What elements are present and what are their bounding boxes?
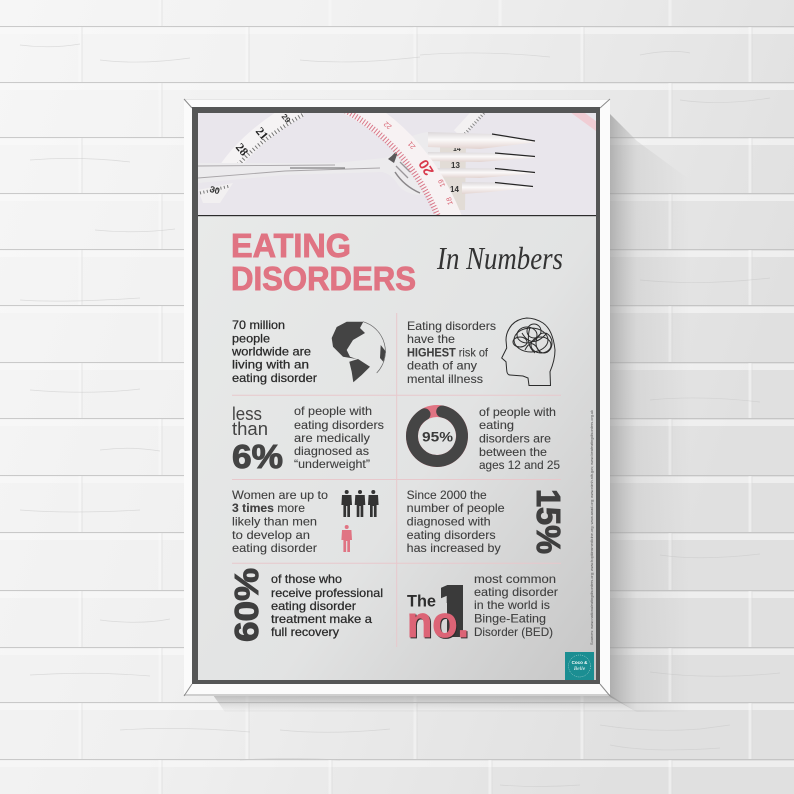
text: highest risk — [407, 319, 496, 386]
panel: highest risk of death — [407, 318, 555, 386]
text: since 2000: number of people — [407, 501, 505, 515]
text: underweight: “underweight” — [294, 457, 370, 471]
tape: pink numbered tape: 21 — [407, 139, 417, 150]
stat: 60% rotated: 60% — [229, 568, 266, 642]
icon: three men — [341, 490, 379, 517]
stat: less than 6% — [232, 404, 283, 475]
logo: Coco & Belle: Coco & — [572, 660, 588, 665]
text: binge-eating disorder: eating disorder — [474, 585, 558, 599]
logo: Coco & Belle: Belle — [574, 666, 586, 672]
panel: less than 6% — [232, 404, 384, 475]
text: underweight: diagnosed as — [294, 444, 369, 458]
text: highest risk: have the — [407, 332, 455, 346]
tape: pink numbered tape: 19 — [438, 178, 447, 188]
text: 60% recovery: of those who — [271, 572, 342, 586]
text: highest risk: Eating disorders — [407, 319, 496, 333]
stat: The no. 1 — [407, 585, 468, 639]
stat: 15% rotated: 15% — [529, 489, 566, 554]
chart: donut 95%: 95% — [422, 430, 453, 444]
text: 70 million: worldwide are — [231, 344, 311, 358]
text: since 2000: eating disorders — [407, 528, 496, 542]
icon: one woman — [341, 525, 352, 552]
tape: strips behind the fork — [440, 110, 485, 210]
tape: strips behind the fork: 14 — [453, 146, 461, 153]
text: 60% recovery: full recovery — [271, 625, 339, 639]
text: highest risk: HIGHEST risk of — [407, 346, 489, 360]
chart: donut 95% — [412, 411, 462, 461]
tape: white left tape: 29 — [280, 112, 293, 125]
tape: white left tape: 21 — [253, 124, 271, 143]
stat: less than 6%: less — [232, 404, 262, 424]
text: highest risk: death of any — [407, 358, 477, 372]
panel: 95% donut — [412, 405, 560, 472]
text: 70 million: eating disorder — [232, 371, 317, 385]
text: 60% recovery: treatment make a — [271, 612, 372, 626]
source note: Sources: www.nationaleatingdisorders.org; www.hopkinsmedicine.org; www.anad.org; www.nimh.nih.gov; www.beateatingdisorders.org.uk — [590, 410, 594, 645]
text: underweight: eating disorders — [294, 418, 384, 432]
tape: strips behind the fork: 14 — [450, 185, 459, 194]
panel: 70 million people — [231, 318, 386, 385]
title: EATING — [231, 228, 351, 265]
tape: strips behind the fork: 13 — [451, 161, 460, 170]
text: underweight: are medically — [294, 431, 370, 445]
text: since 2000 — [407, 488, 505, 555]
text: women 3 times: 3 times more — [232, 501, 305, 515]
text: ages 12 and 25: eating — [479, 418, 514, 432]
title: DISORDERS — [231, 261, 416, 298]
text: 60% recovery: eating disorder — [271, 599, 356, 613]
text: ages 12 and 25: disorders are — [479, 432, 551, 446]
panel: since 2000 — [407, 488, 566, 555]
text: since 2000: Since 2000 the — [407, 488, 487, 502]
title — [231, 228, 416, 298]
text: women 3 times: to develop an — [232, 528, 310, 542]
icon: globe — [332, 322, 386, 382]
text: women 3 times — [232, 488, 328, 555]
tape: white left tape — [198, 108, 304, 203]
tape: pink numbered tape: 20 — [415, 157, 437, 179]
text: 70 million: people — [232, 332, 270, 346]
poster body — [198, 113, 596, 680]
text: women 3 times: likely than men — [232, 514, 317, 528]
tape: pink corner strip — [572, 113, 596, 131]
stat: The no. 1: no. — [408, 599, 470, 648]
text: 70 million: living with an — [232, 358, 309, 372]
text: women 3 times: eating disorder — [232, 541, 317, 555]
tape: white left tape: 30 — [209, 184, 221, 196]
text: ages 12 and 25: between the — [479, 445, 547, 459]
fork — [198, 132, 535, 195]
header photo: fork and measuring tape — [198, 113, 596, 215]
text: binge-eating disorder — [474, 572, 558, 639]
logo: Coco & Belle — [565, 652, 594, 680]
text: binge-eating disorder: Binge-Eating — [474, 612, 546, 626]
stat: less than 6%: than — [232, 419, 268, 439]
tape: pink numbered tape: 22 — [383, 119, 393, 130]
text: women 3 times: Women are up to — [232, 488, 328, 502]
text: ages 12 and 25: of people with — [479, 405, 556, 419]
text: underweight: of people with — [294, 404, 372, 418]
panel: 60% recovery — [229, 568, 383, 642]
text: 70 million — [231, 318, 317, 385]
text: binge-eating disorder: in the world is — [474, 598, 550, 612]
text: highest risk: mental illness — [407, 372, 483, 386]
stat: less than 6%: 6% — [232, 438, 283, 475]
text: ages 12 and 25 — [479, 405, 560, 472]
stat: The no. 1: The — [407, 592, 436, 610]
text: 70 million: 70 million — [232, 318, 285, 332]
subtitle: In Numbers: In Numbers — [436, 240, 563, 276]
white picture frame — [184, 99, 610, 696]
icon: head with tangled brain — [502, 318, 555, 386]
stat: The no. 1: no. — [407, 598, 469, 647]
tape: white left tape: 28 — [233, 140, 251, 159]
panel: the no. 1 — [407, 575, 558, 639]
photo divider — [198, 215, 596, 216]
text: binge-eating disorder: most common — [474, 572, 556, 586]
frame shadow — [213, 114, 690, 712]
tape: pink numbered tape: 18 — [446, 196, 455, 206]
panel: women 3 times — [232, 488, 379, 555]
tape: pink numbered tape — [344, 113, 462, 215]
stat: The no. 1: 1 — [423, 571, 483, 652]
text: 60% recovery — [271, 572, 383, 639]
text: binge-eating disorder: Disorder (BED) — [474, 625, 553, 639]
grid dividers — [232, 313, 561, 647]
text: underweight — [294, 404, 384, 471]
text: since 2000: diagnosed with — [407, 514, 491, 528]
text: 60% recovery: receive professional — [271, 586, 383, 600]
text: ages 12 and 25: ages 12 and 25 — [479, 458, 560, 472]
text: since 2000: has increased by — [407, 541, 501, 555]
